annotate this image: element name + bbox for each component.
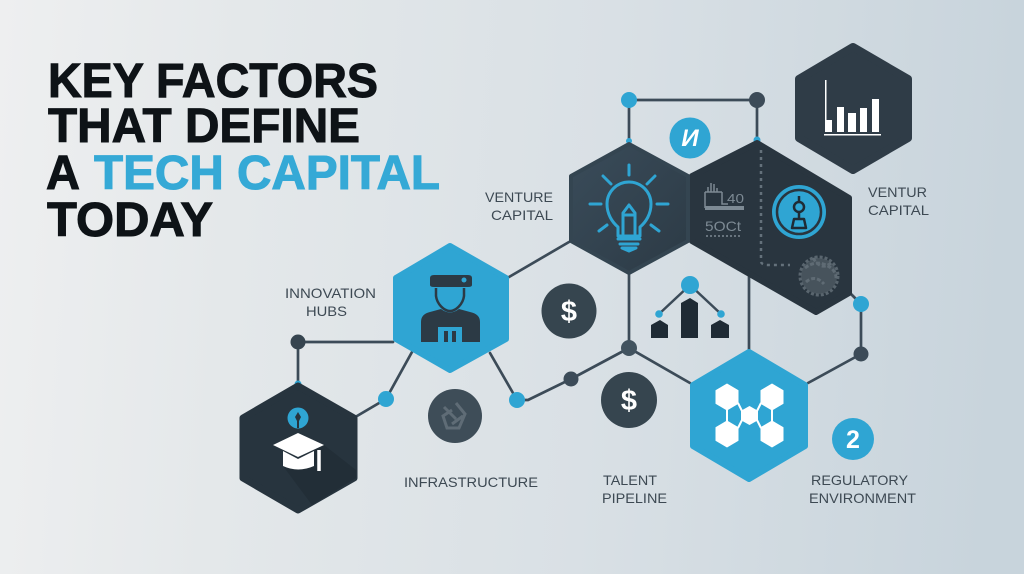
badge: letter N: И (681, 125, 699, 152)
label: venture capital right: CAPITAL (868, 202, 929, 218)
icon: hex molecule (716, 384, 783, 447)
badge: number 2: 2 (846, 426, 860, 454)
title: TODAY (47, 194, 213, 247)
label: venture capital left (485, 189, 553, 223)
label: talent pipeline: TALENT (603, 472, 657, 488)
label: innovation hubs: HUBS (306, 303, 347, 319)
dotted divider (761, 150, 790, 265)
label: venture capital right: VENTUR (868, 184, 927, 200)
cap shadow (283, 445, 356, 505)
label: regulatory environment: ENVIRONMENT (809, 490, 916, 506)
hexagon: graduation cap (243, 386, 356, 510)
label: innovation hubs: INNOVATION (285, 285, 376, 301)
label: infrastructure: INFRASTRUCTURE (404, 474, 538, 490)
icon: globe (800, 257, 838, 295)
hexagon: regulatory network (693, 352, 805, 479)
badge: number 2 (832, 418, 874, 460)
badge: letter N (670, 118, 710, 158)
icon: blue dial (772, 185, 826, 239)
title: KEY FACTORS (48, 55, 378, 108)
label: regulatory environment: REGULATORY (811, 472, 909, 488)
icon: dollar circle upper: $ (561, 296, 577, 328)
icon: dollar circle upper (542, 284, 596, 338)
label: innovation hubs (285, 285, 376, 319)
icon: dollar circle lower (601, 372, 657, 428)
title: A (46, 147, 80, 200)
icon: dollar circle lower: $ (621, 385, 637, 417)
mini chart text: 40 (727, 191, 744, 206)
label: venture capital right (868, 184, 929, 218)
connector network (298, 100, 861, 416)
icon: light bulb (590, 165, 668, 251)
label: talent pipeline (602, 472, 667, 506)
hexagon: big dark venture capital (692, 143, 849, 312)
mini chart text: 5OCt (705, 218, 741, 234)
mini chart text (705, 183, 744, 236)
title: THAT DEFINE (48, 100, 360, 153)
icon: graduation cap (273, 408, 324, 471)
connector nodes (290, 92, 869, 408)
icon: infrastructure circle (428, 389, 482, 443)
icon: hierarchy (651, 276, 729, 338)
hexagon: innovation hubs (396, 246, 506, 370)
label: venture capital left: VENTURE (485, 189, 553, 205)
label: venture capital left: CAPITAL (491, 207, 553, 223)
icon: bar chart (824, 80, 881, 136)
icon: person (421, 275, 480, 342)
hexagon: bar chart (799, 47, 908, 170)
label: regulatory environment (809, 472, 916, 506)
title: TECH CAPITAL (94, 147, 440, 200)
title (46, 55, 440, 247)
label: talent pipeline: PIPELINE (602, 490, 667, 506)
hexagon: light bulb (571, 144, 688, 273)
